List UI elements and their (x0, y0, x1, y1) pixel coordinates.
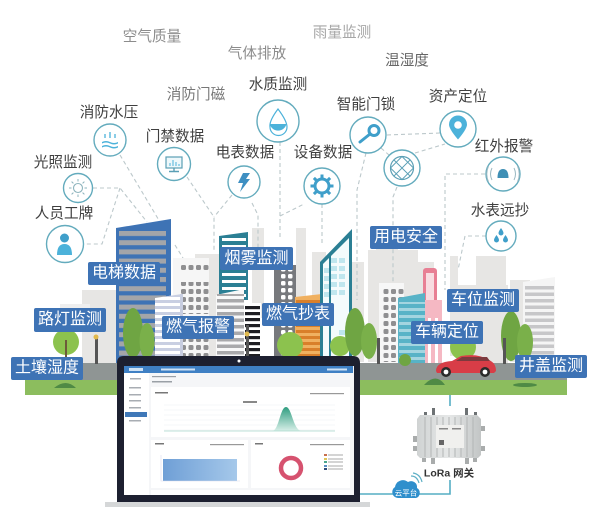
laptop base (105, 502, 370, 507)
building: dark dotted (274, 265, 296, 365)
grey outer labels (123, 24, 429, 103)
tag: 车位监测: 车位监测 (451, 290, 515, 308)
cloud platform icon: 云平台 (395, 488, 417, 498)
sensor: 消防水压: 消防水压 (80, 104, 138, 121)
building: orange striped (295, 294, 322, 362)
tag: 井盖监测 (515, 355, 587, 378)
building: teal right (398, 293, 425, 363)
tag: 井盖监测: 井盖监测 (519, 356, 583, 374)
screen header (124, 366, 353, 373)
label: 温湿度: 温湿度 (385, 52, 429, 69)
screen sidebar (124, 373, 149, 495)
gateway label: LoRa 网关 (424, 466, 475, 480)
building: white dotted (173, 258, 210, 364)
sensor: 水表远抄 (471, 202, 529, 251)
sensor: 电表数据: 电表数据 (216, 144, 274, 161)
tag: 电梯数据 (88, 262, 160, 285)
trees and lamps (53, 308, 533, 366)
sensor: 光照监测: 光照监测 (34, 154, 92, 171)
cloud platform icon (392, 473, 422, 498)
building: blue tower (116, 219, 171, 365)
connection lines to gateway and cloud (360, 395, 450, 494)
panel: bar chart (151, 440, 248, 488)
sensor: 门禁数据 (146, 128, 204, 180)
building: gray striped right (523, 277, 555, 363)
tag: 燃气报警 (162, 316, 234, 339)
tag: 土壤湿度: 土壤湿度 (15, 358, 79, 376)
tag: 土壤湿度 (11, 357, 83, 380)
sensor: 水质监测 (249, 76, 307, 142)
tag: 用电安全 (370, 226, 442, 249)
tag: 路灯监测: 路灯监测 (38, 310, 102, 328)
screen breadcrumb (152, 376, 176, 382)
sensor: 智能门锁 (337, 95, 396, 153)
sensor: 红外报警 (475, 138, 534, 191)
tags (11, 226, 587, 380)
sensor: 用电安全 globe (384, 150, 420, 186)
tag: 电梯数据: 电梯数据 (92, 264, 156, 282)
connector lines (84, 133, 486, 300)
sensor: 红外报警: 红外报警 (475, 138, 534, 155)
label: 消防门磁: 消防门磁 (167, 86, 226, 103)
panel: area chart (151, 387, 350, 437)
label: 雨量监测: 雨量监测 (313, 24, 371, 41)
sensor: 消防水压 (80, 104, 138, 156)
tag: 路灯监测 (34, 308, 106, 332)
tag: 烟雾监测: 烟雾监测 (224, 249, 289, 267)
sensor: 电表数据 (216, 144, 274, 198)
sensor: 资产定位 (429, 88, 487, 147)
label: 空气质量: 空气质量 (123, 28, 181, 45)
sensor: 门禁数据: 门禁数据 (146, 128, 204, 145)
building: pink tower (423, 268, 442, 363)
sensor: 智能门锁: 智能门锁 (337, 95, 396, 113)
tag: 燃气抄表 (262, 303, 334, 326)
building: lavender striped (155, 294, 183, 362)
tag: 烟雾监测 (220, 247, 293, 270)
laptop screen (124, 366, 354, 495)
building: black striped (244, 303, 261, 363)
sensor: 设备数据 (294, 144, 352, 204)
building: teal tower (320, 229, 352, 362)
sensor: 设备数据: 设备数据 (294, 144, 352, 161)
buildings (116, 219, 555, 365)
sensor: 水表远抄: 水表远抄 (471, 202, 529, 219)
tag: 车辆定位 (411, 321, 483, 344)
building: gray striped (216, 289, 244, 362)
tag: 车位监测 (447, 289, 519, 312)
panel: donut chart (251, 440, 350, 488)
background skyline (60, 228, 530, 365)
building: white dotted right (379, 283, 404, 363)
laptop bezel (117, 356, 360, 502)
label: 气体排放: 气体排放 (228, 45, 287, 62)
ground (25, 363, 567, 395)
sensor: 人员工牌 (35, 205, 93, 262)
gateway device (413, 408, 485, 480)
tag: 燃气抄表: 燃气抄表 (266, 304, 330, 322)
tag: 用电安全: 用电安全 (374, 228, 438, 246)
sensor: 水质监测: 水质监测 (249, 76, 307, 93)
car (436, 355, 496, 377)
tag: 燃气报警: 燃气报警 (166, 318, 230, 336)
sensor: 光照监测 (34, 154, 92, 202)
laptop (105, 356, 370, 507)
sensor: 资产定位: 资产定位 (429, 88, 487, 105)
sensor: 人员工牌: 人员工牌 (35, 205, 93, 222)
building: teal striped (219, 232, 248, 300)
tag: 车辆定位: 车辆定位 (415, 322, 479, 340)
